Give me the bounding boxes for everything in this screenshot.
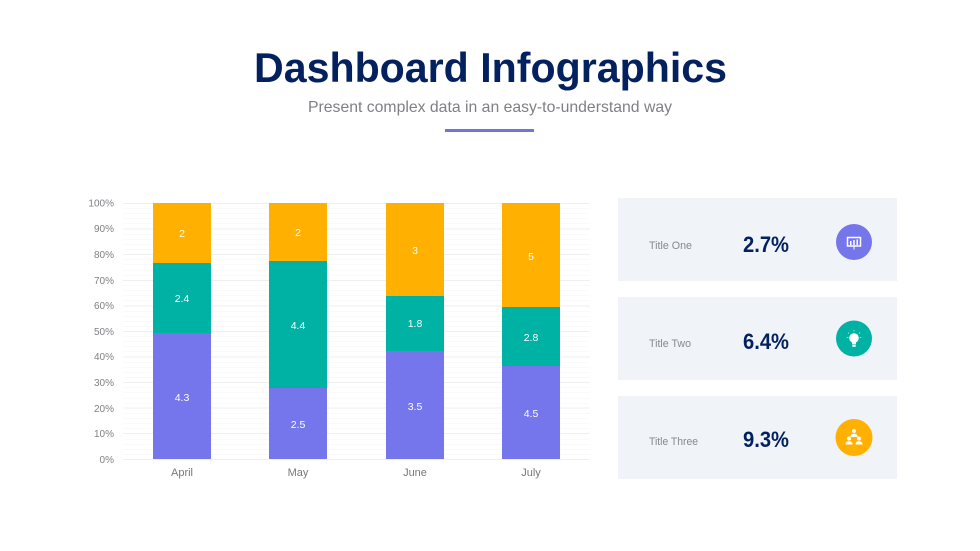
bar: May (269, 203, 327, 459)
y-axis labels: 60% (94, 301, 114, 312)
panel: title two: 6.4% (743, 329, 789, 354)
y-axis labels: 30% (94, 378, 114, 389)
y-axis labels: 10% (94, 429, 114, 440)
bar: April: 2 (179, 228, 185, 240)
subtitle: Present complex data in an easy-to-understand way (308, 99, 672, 116)
y-axis labels: 70% (94, 276, 114, 287)
panel: title one: Title One (649, 240, 692, 252)
x-axis labels: May (288, 467, 309, 479)
icon: presentation chart (836, 224, 872, 260)
x-axis labels: July (521, 467, 541, 479)
panel: title three: 9.3% (743, 427, 789, 452)
panel: title three: Title Three (649, 436, 698, 448)
bar: June: 3 (412, 245, 418, 257)
bar: June (386, 203, 444, 459)
panel: title three (618, 396, 897, 479)
bar: June: 3.5 (408, 401, 422, 413)
bar: May: 2.5 (291, 419, 305, 431)
icon: light bulb (836, 320, 872, 356)
panel: title one: 2.7% (743, 232, 789, 257)
y-axis labels: 80% (94, 250, 114, 261)
stacked bar chart (88, 198, 590, 479)
bar: July: 4.5 (524, 408, 538, 420)
x-axis labels: April (171, 467, 193, 479)
y-axis labels: 40% (94, 352, 114, 363)
title: Dashboard Infographics (254, 44, 727, 91)
bar: April (153, 203, 211, 459)
bar: July: 5 (528, 251, 534, 263)
y-axis labels: 100% (88, 198, 114, 210)
title underline (445, 129, 534, 132)
bar: May: 4.4 (291, 320, 305, 332)
y-axis labels: 20% (94, 404, 114, 415)
bar: June: 1.8 (408, 318, 422, 330)
bar: July: 2.8 (524, 332, 538, 344)
panel: title two (618, 297, 897, 380)
bar: April: 4.3 (175, 392, 189, 404)
y-axis labels: 90% (94, 224, 114, 235)
panel: title two: Title Two (649, 338, 691, 350)
y-axis labels: 50% (94, 327, 114, 338)
bar: July (502, 203, 560, 459)
panel: title one (618, 198, 897, 281)
bar: May: 2 (295, 227, 301, 239)
y-axis labels (88, 198, 114, 466)
icon: team hierarchy (836, 419, 872, 456)
x-axis labels: June (403, 467, 427, 479)
bar: April: 2.4 (175, 293, 189, 305)
x-axis labels (171, 467, 541, 479)
y-axis labels: 0% (100, 455, 114, 466)
